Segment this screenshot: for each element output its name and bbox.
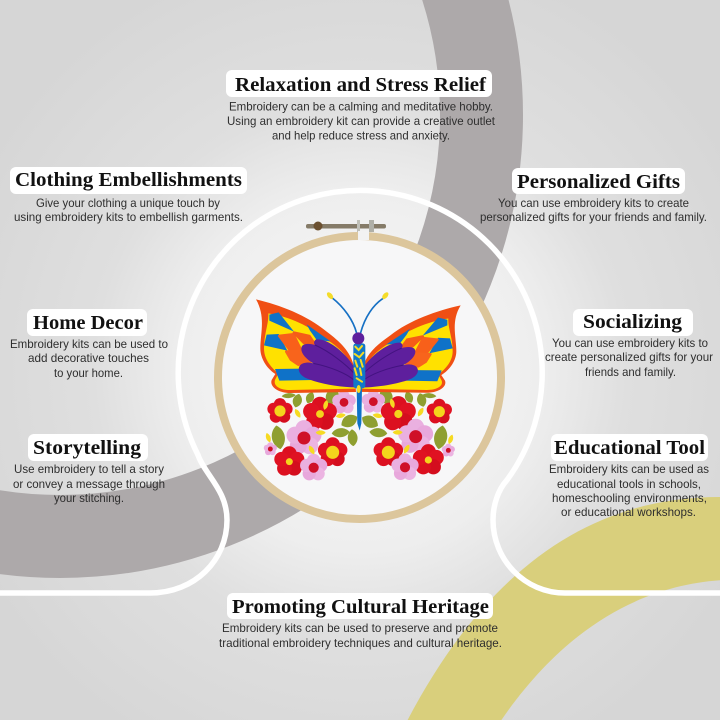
description — [14, 196, 243, 224]
hoop screw — [306, 220, 386, 232]
heading: Clothing Embellishments — [15, 169, 242, 191]
gray ring band — [0, 0, 482, 536]
description: homeschooling environments, — [552, 491, 707, 505]
lower flowers and leaves — [264, 386, 455, 480]
white frame outline — [0, 190, 720, 593]
description: or convey a message through — [13, 477, 165, 491]
description: Give your clothing a unique touch by — [36, 196, 220, 210]
description: Use embroidery to tell a story — [14, 462, 164, 476]
description: or educational workshops. — [561, 505, 696, 519]
description: educational tools in schools, — [557, 477, 701, 491]
yellow curved band — [405, 497, 720, 720]
description — [549, 462, 709, 519]
description: friends and family. — [585, 365, 676, 379]
block: Clothing Embellishments — [10, 167, 247, 224]
heading — [28, 434, 148, 461]
description: to your home. — [54, 366, 123, 380]
heading: Educational Tool — [554, 437, 705, 459]
description: Embroidery kits can be used as — [549, 462, 709, 476]
butterfly body — [352, 332, 365, 431]
block: Personalized Gifts — [480, 168, 707, 224]
description: your stitching. — [54, 491, 124, 505]
description — [10, 337, 168, 380]
block: Storytelling — [13, 434, 165, 505]
heading: Relaxation and Stress Relief — [235, 74, 486, 96]
heading: Socializing — [583, 311, 682, 333]
heading: Promoting Cultural Heritage — [232, 596, 489, 618]
description: traditional embroidery techniques and cultural heritage. — [219, 636, 502, 650]
heading: Storytelling — [33, 437, 141, 459]
heading — [573, 309, 693, 336]
description: using embroidery kits to embellish garments. — [14, 210, 243, 224]
block: Promoting Cultural Heritage — [219, 593, 502, 650]
description — [480, 196, 707, 224]
description: You can use embroidery kits to — [552, 336, 708, 350]
heading: Home Decor — [33, 312, 143, 334]
description — [219, 621, 502, 650]
description: Using an embroidery kit can provide a creative outlet — [227, 114, 496, 128]
description: personalized gifts for your friends and family. — [480, 210, 707, 224]
description — [227, 100, 496, 142]
description: Embroidery can be a calming and meditative hobby. — [229, 100, 493, 114]
embroidery hoop illustration — [218, 220, 501, 519]
block: Home Decor — [10, 309, 168, 380]
description: and help reduce stress and anxiety. — [272, 128, 450, 142]
block: Educational Tool — [549, 434, 709, 519]
description: add decorative touches — [28, 351, 149, 365]
description — [545, 336, 713, 379]
description: Embroidery kits can be used to preserve and promote — [222, 621, 498, 635]
description: create personalized gifts for your — [545, 350, 713, 364]
antennae — [326, 291, 390, 333]
description: Embroidery kits can be used to — [10, 337, 168, 351]
block: Socializing — [545, 309, 713, 379]
right wing — [361, 305, 461, 393]
description — [13, 462, 165, 505]
hoop gap — [358, 231, 369, 240]
left wing — [256, 299, 356, 393]
butterfly embroidery — [256, 291, 461, 480]
heading: Personalized Gifts — [517, 171, 680, 193]
wooden hoop ring — [218, 236, 501, 519]
description: You can use embroidery kits to create — [498, 196, 689, 210]
block: Relaxation and Stress Relief — [226, 70, 496, 142]
